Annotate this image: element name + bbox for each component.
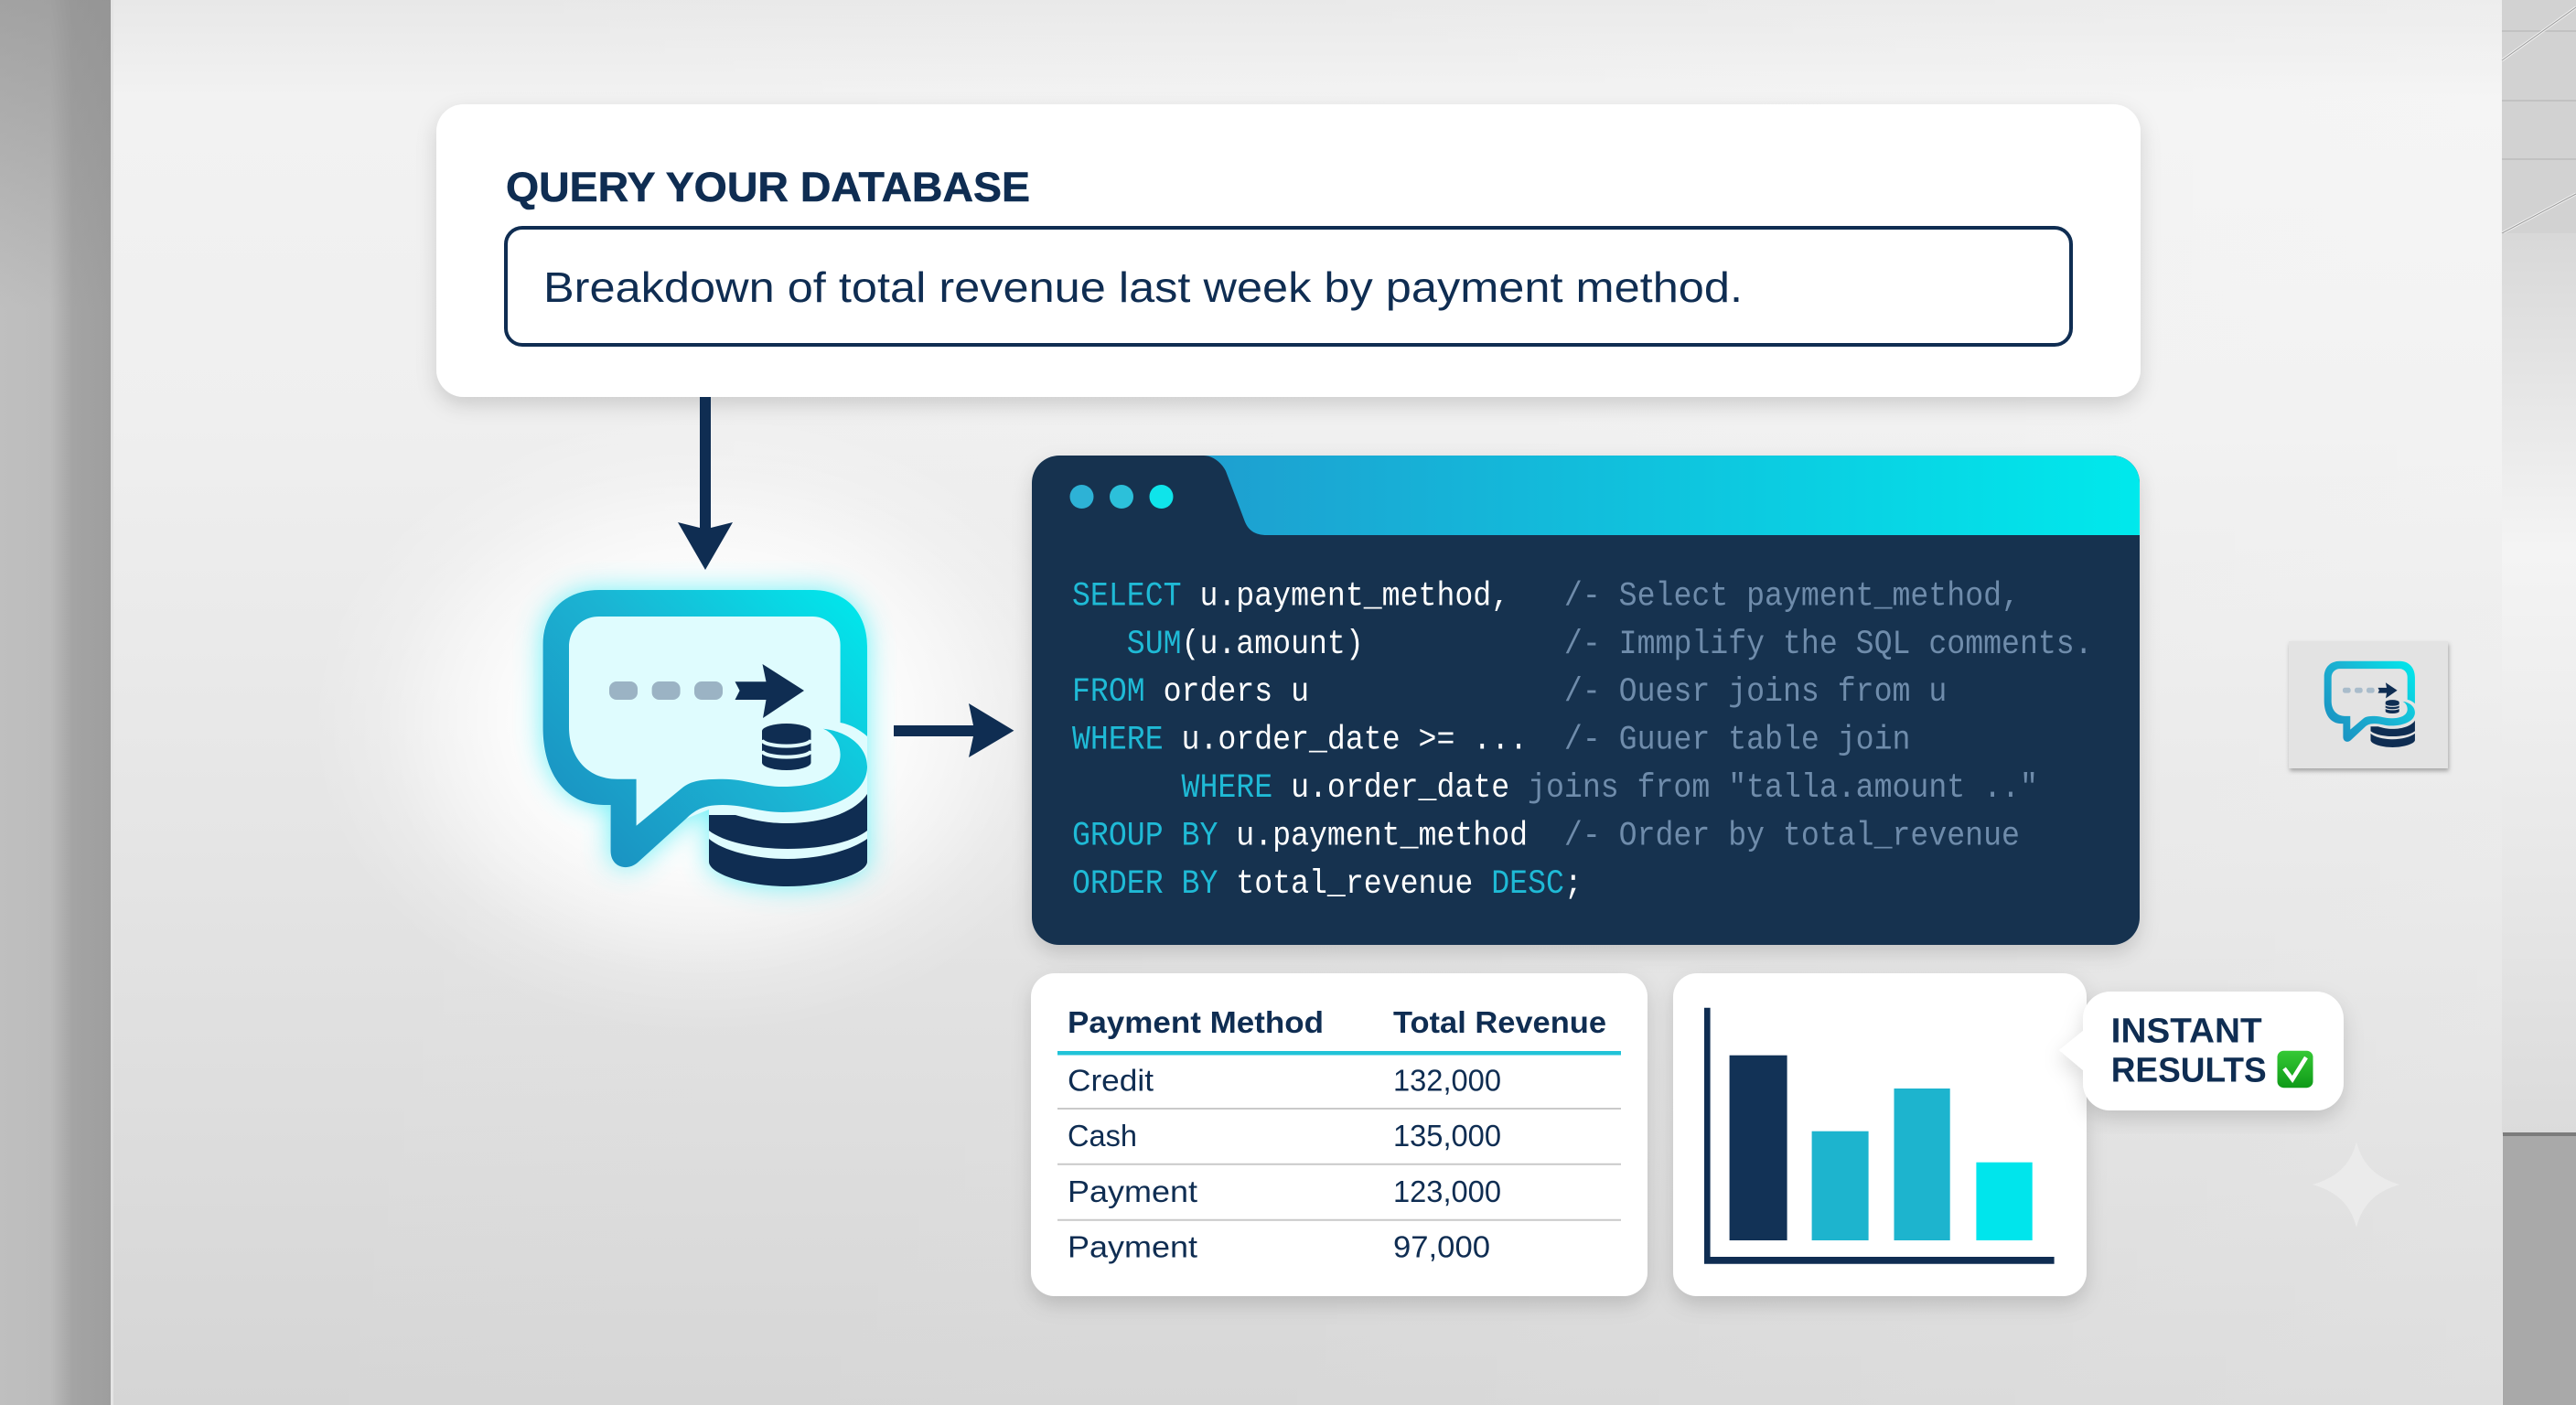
SQL code [1072, 577, 2093, 903]
table rows: 135,000 [1393, 1119, 1501, 1153]
icon: small chat bubble with database [2324, 661, 2415, 747]
SQL code: SUM(u.amount) /- Immplify the SQL comments. [1072, 625, 2093, 663]
table rows: 132,000 [1393, 1064, 1501, 1098]
callout: instant results [2059, 992, 2344, 1110]
heading: query your database: QUERY YOUR DATABASE [506, 164, 1030, 210]
panel: SQL code window [1032, 456, 2140, 945]
SQL code: GROUP BY u.payment_method /- Order by total_revenue [1072, 817, 2020, 855]
bubble outline [543, 590, 867, 867]
table header [1068, 1005, 1606, 1039]
right back room [2502, 0, 2576, 1405]
glow behind chat-database icon [311, 412, 1098, 1034]
bubble interior [542, 590, 867, 886]
callout text [2111, 1012, 2267, 1090]
SQL code: FROM orders u /- Ouesr joins from u [1072, 673, 1947, 712]
wall plaque with small icon [2289, 641, 2448, 768]
arrow: query card down to icon [678, 397, 733, 570]
table rows: Credit [1068, 1064, 1154, 1098]
SQL code: WHERE u.order_date joins from "talla.amount .." [1072, 768, 2038, 808]
table header: Total Revenue [1393, 1005, 1606, 1039]
callout text: RESULTS [2111, 1052, 2267, 1090]
window control dots [1070, 485, 1173, 509]
SQL code: WHERE u.order_date >= ... /- Guuer table join [1072, 721, 1910, 759]
decorative sparkle [2313, 1142, 2399, 1228]
table rows: Payment [1068, 1174, 1197, 1208]
panel: results table [1031, 973, 1648, 1296]
icon: green check [2278, 1051, 2313, 1088]
left side wall [0, 0, 112, 1405]
header rule [1057, 1051, 1621, 1056]
arrow: icon to code window [894, 703, 1014, 757]
large database [709, 794, 867, 886]
input box with query text [506, 228, 2071, 345]
chart axes [1704, 1008, 2055, 1264]
callout text: INSTANT [2111, 1012, 2262, 1050]
icon: chat bubble with database [542, 590, 867, 886]
SQL code: ORDER BY total_revenue DESC; [1072, 864, 1583, 903]
row dividers [1057, 1109, 1621, 1220]
panel: bar chart [1673, 973, 2087, 1296]
table rows [1068, 1064, 1501, 1264]
bars [1730, 1056, 2033, 1240]
table rows: Payment [1068, 1230, 1197, 1264]
window tab bar [1204, 456, 2140, 535]
typing dots [609, 681, 723, 700]
small database [762, 724, 810, 770]
input box with query text: Breakdown of total revenue last week by payment method. [543, 263, 1743, 311]
table rows: 97,000 [1393, 1230, 1490, 1264]
SQL code: SELECT u.payment_method, /- Select payment_method, [1072, 577, 2020, 616]
table rows: 123,000 [1393, 1174, 1501, 1208]
card: query your database [436, 104, 2141, 397]
small arrow [735, 664, 804, 718]
table rows: Cash [1068, 1119, 1137, 1153]
table header: Payment Method [1068, 1005, 1324, 1039]
